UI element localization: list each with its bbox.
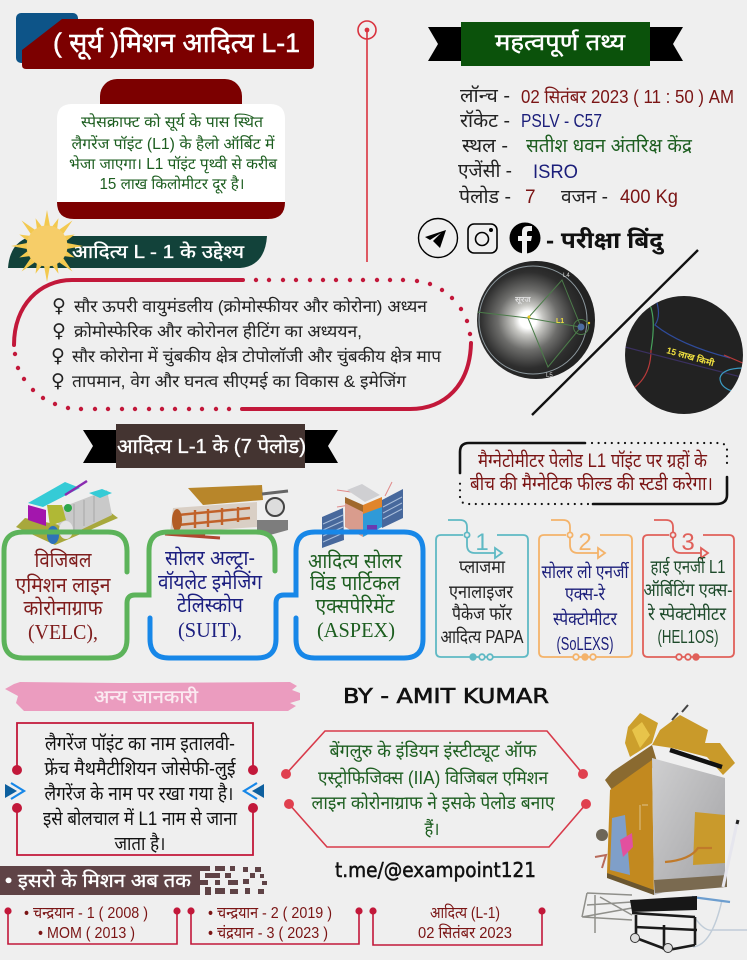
panel: key facts: रॉकेट -	[460, 109, 510, 132]
payload: VELC text: एमिशन लाइन	[16, 573, 111, 597]
panel: payload 2 SoLEXS: स्पेक्टोमीटर	[553, 608, 618, 629]
heading: key facts ribbon: महत्वपूर्ण तथ्य	[495, 29, 626, 57]
panel: payload 3 HEL1OS: ऑर्बिटिंग एक्स-	[644, 579, 732, 600]
panel: spacecraft intro card: स्पेसक्राफ्ट को सूर्य के पास स्थित	[81, 112, 264, 132]
callout: magnetometer	[460, 443, 727, 504]
payload: ASPEX text: (ASPEX)	[317, 618, 395, 642]
panel: Lagrange point naming	[12, 723, 258, 855]
panel: objectives list: सौर कोरोना में चुंबकीय क्षेत्र टोपोलॉजी और चुंबकीय क्षेत्र माप	[72, 345, 441, 368]
timeline: Chandrayaan-1 and MOM	[4, 905, 181, 944]
panel: payload 2 SoLEXS	[539, 520, 632, 660]
panel: payload 3 HEL1OS: 3	[681, 529, 695, 556]
panel: spacecraft intro card: लैगरेंज पॉइंट (L1) के हैलो ऑर्बिट में	[72, 134, 275, 153]
heading: objectives banner: आदित्य L - 1 के उद्देश्य	[72, 240, 244, 262]
icon: instagram	[468, 224, 497, 253]
panel: spacecraft intro card	[57, 79, 285, 219]
panel: payload 2 SoLEXS: सोलर लो एनर्जी	[542, 561, 630, 582]
panel: objectives list: ♀	[52, 320, 66, 342]
payload: VELC text	[16, 548, 111, 644]
payload: ASPEX text	[308, 549, 402, 642]
panel: spacecraft intro card: 15 लाख किलोमीटर दूर है।	[100, 174, 244, 194]
timeline: Aditya L1	[369, 904, 546, 945]
panel: objectives list: ♀	[51, 370, 65, 392]
panel: IIA hexagon note: बेंगलुरु के इंडियन इंस्टीट्यूट ऑफ	[330, 740, 538, 763]
panel: Lagrange point naming: लैगरेंज के नाम पर रखा गया है।	[44, 782, 234, 805]
panel: IIA hexagon note	[281, 731, 591, 847]
diagram: sun and Lagrange points	[477, 261, 595, 379]
heading: other information brush banner: अन्य जानकारी	[94, 687, 198, 707]
brand label: - परीक्षा बिंदु	[546, 227, 665, 255]
payload: VELC text: (VELC),	[28, 620, 98, 644]
payload: ASPEX text: आदित्य सोलर	[308, 549, 402, 573]
panel: Lagrange point naming: फ्रेंच मैथमैटीशियन जोसेफी-लुई	[44, 757, 236, 781]
panel: IIA hexagon note: हैं।	[424, 818, 440, 839]
panel: objectives list	[13, 278, 472, 411]
panel: payload 3 HEL1OS: (HEL1OS)	[658, 627, 718, 647]
timeline: Aditya L1: 02 सितंबर 2023	[418, 924, 512, 942]
panel: objectives list: ♀	[51, 345, 65, 367]
heading: other information brush banner	[5, 682, 300, 711]
panel: payload 3 HEL1OS	[643, 520, 734, 660]
diagram: sun and Lagrange points: L1	[556, 318, 564, 325]
panel: objectives list: ♀	[52, 295, 66, 317]
panel: payload 3 HEL1OS: हाई एनर्जी L1	[650, 556, 726, 577]
timeline: Chandrayaan-1 and MOM: • चन्द्रयान - 1 ( 2008 )	[24, 905, 148, 922]
panel: IIA hexagon note: एस्ट्रोफिजिक्स (IIA) विजिबल एमिशन	[318, 768, 549, 788]
panel: key facts: 7	[525, 187, 536, 208]
panel: payload 1 PAPA	[436, 520, 528, 660]
payload: ASPEX text: विंड पार्टिकल	[310, 571, 401, 595]
byline: BY - AMIT KUMAR	[343, 684, 549, 708]
panel: payload boxes outline green	[4, 532, 275, 658]
panel: Lagrange point naming: जाता है।	[114, 832, 166, 855]
timeline: Chandrayaan-2 and 3: • चंद्रयान - 3 ( 2023 )	[208, 924, 328, 942]
timeline: Chandrayaan-1 and MOM: • MOM ( 2013 )	[38, 925, 135, 942]
title	[16, 13, 314, 69]
vertical marker line	[358, 21, 376, 262]
icon: sun	[11, 210, 83, 282]
panel: payload 2 SoLEXS: 2	[578, 529, 592, 556]
panel: key facts: 400 Kg	[620, 187, 678, 208]
diagram: sun and Lagrange points: सूरज	[515, 295, 531, 305]
panel: payload 2 SoLEXS: एक्स-रे	[565, 583, 606, 604]
panel: payload 1 PAPA: आदित्य PAPA	[440, 627, 524, 647]
panel: key facts: PSLV - C57	[521, 111, 602, 131]
payload: VELC text: कोरोनाग्राफ	[24, 596, 103, 620]
diagram: zoomed orbit 15 lakh km: 15 लाख किमी	[665, 344, 716, 369]
illustration: SUIT instrument	[165, 485, 288, 538]
payload: SUIT text: सोलर अल्ट्रा-	[165, 546, 255, 570]
payload: VELC text: विजिबल	[34, 548, 92, 572]
panel: key facts: लॉन्च -	[460, 85, 510, 107]
panel: key facts: स्थल -	[462, 136, 508, 157]
diagram: zoomed orbit 15 lakh km	[625, 296, 745, 414]
diagonal divider	[532, 250, 698, 415]
panel: key facts	[458, 85, 734, 208]
icon: right chevrons	[244, 783, 264, 799]
heading: objectives banner	[8, 236, 267, 268]
callout: magnetometer: बीच की मैग्नेटिक फील्ड की स्टडी करेगा।	[470, 472, 713, 495]
panel: key facts: सतीश धवन अंतरिक्ष केंद्र	[526, 134, 693, 157]
panel: key facts: वजन -	[561, 187, 608, 208]
timeline: Chandrayaan-2 and 3	[187, 905, 363, 944]
panel: objectives list: क्रोमोस्फेरिक और कोरोनल हीटिंग का अध्ययन,	[74, 320, 362, 341]
payload: SUIT text: (SUIT),	[178, 618, 242, 642]
illustration: Aditya L1 spacecraft	[582, 705, 747, 952]
payload: ASPEX text: एक्सपेरिमेंट	[316, 594, 395, 618]
heading: payloads ribbon: आदित्य L-1 के (7 पेलोड)	[117, 434, 306, 458]
panel: IIA hexagon note: लाइन कोरोनाग्राफ ने इसके पेलोड बनाए	[312, 792, 556, 813]
payload: SUIT text	[158, 546, 263, 642]
heading: ISRO missions banner: • इसरो के मिशन अब तक	[5, 869, 191, 892]
panel: payload 1 PAPA: एनालाइजर	[449, 582, 514, 602]
payload: SUIT text: वॉयलेट इमेजिंग	[158, 570, 263, 594]
callout: magnetometer: मैग्नेटोमीटर पेलोड L1 पॉइंट पर ग्रहों के	[478, 449, 707, 472]
illustration: VELC instrument	[16, 481, 118, 545]
heading: payloads ribbon	[83, 424, 338, 468]
diagram: sun and Lagrange points: L4	[563, 273, 570, 279]
panel: objectives list: तापमान, वेग और घनत्व सीएमई का विकास & इमेजिंग	[72, 370, 406, 391]
timeline: Chandrayaan-2 and 3: • चन्द्रयान - 2 ( 2019 )	[208, 905, 332, 922]
panel: Lagrange point naming: इसे बोलचाल में L1 नाम से जाना	[43, 807, 238, 830]
panel: payload 1 PAPA: 1	[475, 529, 489, 556]
diagram: sun and Lagrange points: L5	[546, 373, 553, 379]
panel: key facts: एजेंसी -	[458, 159, 512, 182]
panel: payload 3 HEL1OS: रे स्पेक्टोमीटर	[647, 603, 727, 624]
panel: key facts: पेलोड -	[459, 185, 511, 208]
heading: ISRO missions banner	[0, 866, 267, 895]
illustration: ASPEX spacecraft	[322, 482, 403, 548]
icon: facebook	[510, 222, 540, 254]
contact link: t.me/@exampoint121	[335, 858, 536, 882]
payload: SUIT text: टेलिस्कोप	[177, 593, 244, 617]
panel: payload 1 PAPA: पैकेज फॉर	[452, 603, 513, 624]
panel: key facts: ISRO	[533, 162, 578, 183]
heading: key facts ribbon	[428, 22, 683, 66]
icon: left chevrons	[5, 783, 24, 799]
panel: spacecraft intro card: भेजा जाएगा। L1 पॉइंट पृथ्वी से करीब	[69, 154, 278, 174]
timeline: Aditya L1: आदित्य (L-1)	[430, 904, 500, 922]
title: ( सूर्य )मिशन आदित्य L-1	[53, 27, 300, 60]
panel: key facts: 02 सितंबर 2023 ( 11 : 50 ) AM	[521, 87, 734, 107]
icon: telegram	[418, 218, 458, 258]
panel: payload 2 SoLEXS: (SoLEXS)	[556, 634, 614, 654]
panel: objectives list: सौर ऊपरी वायुमंडलीय (क्रोमोस्फीयर और कोरोना) अध्यन	[74, 296, 428, 318]
panel: Lagrange point naming: लैगरेंज पॉइंट का नाम इतालवी-	[45, 732, 235, 755]
panel: payload boxes outline blue	[150, 532, 423, 658]
panel: payload 1 PAPA: प्लाजमा	[459, 557, 505, 577]
